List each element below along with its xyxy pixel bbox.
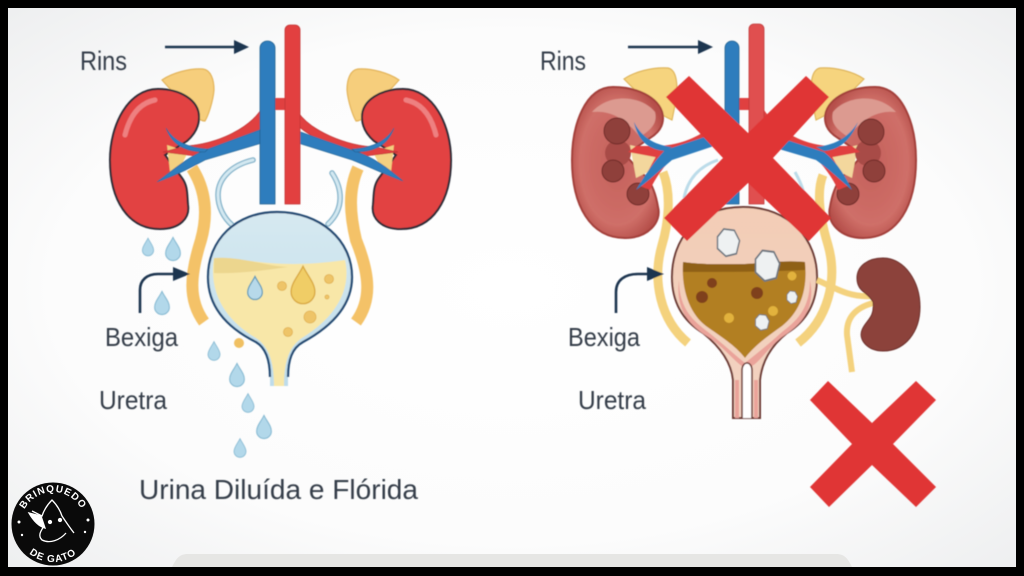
icon: healthy bladder [208, 212, 352, 386]
label: Rins: Rins [540, 46, 586, 76]
icon: bladder tubes [218, 160, 340, 225]
panel: healthy urinary system [80, 25, 451, 505]
icon: diseased bladder [672, 207, 817, 418]
urine surface shade [214, 258, 288, 273]
caption: Urina Diluída e Flórida: Urina Diluída e Flórida [139, 474, 418, 505]
bottom grey panel edge [172, 554, 852, 567]
icon: renal arteries [163, 98, 398, 156]
icon: right ureter [798, 175, 832, 343]
logo text top: BRINQUEDO [19, 485, 86, 509]
label: Bexiga: Bexiga [105, 322, 178, 352]
icon: aorta [285, 25, 300, 204]
icon: renal arteries [628, 98, 860, 190]
urine surface shade [683, 261, 805, 272]
icon: adrenal glands [624, 68, 864, 120]
icon: large red cross over kidneys [664, 76, 831, 241]
icon: right ureter [351, 168, 367, 322]
label: Bexiga: Bexiga [568, 322, 640, 352]
icon: left ureter [658, 172, 688, 343]
label: Rins: Rins [80, 46, 127, 76]
blue drop in bladder [248, 276, 262, 300]
icon: diseased right kidney [825, 87, 916, 238]
icon: lower red cross [810, 381, 936, 507]
icon: right kidney [362, 89, 451, 229]
logo cat [29, 500, 74, 542]
arrow: points to kidneys [165, 40, 249, 54]
icon: small shrunken kidney [857, 258, 920, 351]
logo: Brinquedo de Gato [12, 482, 94, 566]
urine fill [213, 258, 347, 386]
icon: renal veins [157, 128, 403, 182]
label: Uretra: Uretra [99, 385, 167, 415]
icon: left kidney [110, 89, 199, 229]
icon: detached ureter [817, 280, 873, 372]
logo text bottom: DE GATO [30, 548, 75, 562]
icon: adrenal glands [162, 69, 399, 121]
bladder wall lining [678, 280, 811, 366]
urethra wall [737, 380, 756, 418]
icon: falling water drops [142, 237, 271, 457]
icon: diseased left kidney [572, 87, 663, 238]
icon: aorta [749, 24, 764, 204]
arrow: points to bladder [616, 267, 664, 313]
icon: bladder stones [718, 229, 798, 330]
icon: orange droplet [234, 338, 244, 348]
arrow: points to bladder [140, 267, 190, 313]
icon: left ureter [192, 168, 205, 322]
label: Uretra: Uretra [578, 385, 646, 415]
urethra channel [742, 363, 752, 418]
logo stars [18, 518, 90, 536]
sediment urine [683, 261, 806, 358]
icon: bladder tubes [684, 160, 805, 205]
icon: vena cava [725, 41, 739, 204]
icon: renal veins [634, 122, 858, 190]
panel: diseased urinary system [540, 24, 936, 507]
sediment dots [278, 274, 334, 336]
dark and yellow deposits [696, 272, 796, 323]
yellow drop in bladder [291, 266, 315, 304]
icon: vena cava [260, 41, 275, 204]
arrow: points to kidneys [628, 40, 713, 54]
